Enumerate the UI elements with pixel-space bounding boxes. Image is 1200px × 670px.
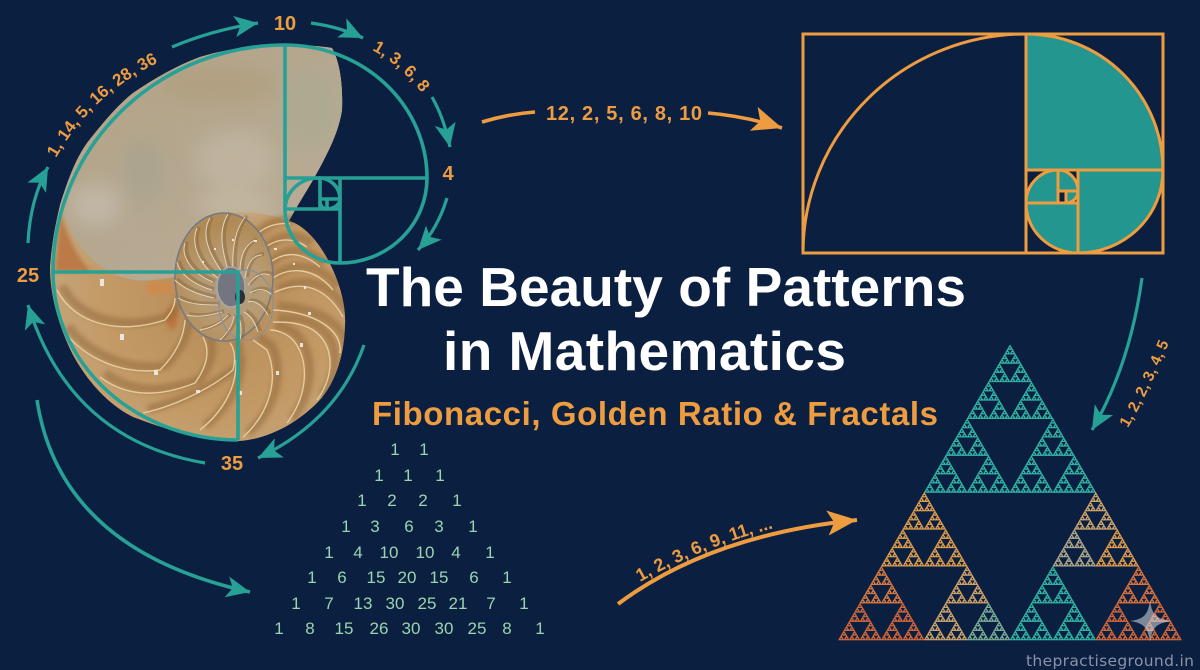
cycle arrows around shell (28, 23, 450, 592)
number triangle: 1 (274, 619, 284, 638)
number triangle: 1 (435, 466, 445, 485)
shell: inner septa (175, 214, 272, 340)
number triangle: 6 (337, 568, 347, 587)
shell: inner septa shadow (177, 213, 274, 339)
number triangle: 15 (430, 568, 448, 587)
number triangle: 1 (324, 543, 334, 562)
number triangle: 1 (519, 594, 529, 613)
shell: chamber septa (57, 224, 343, 437)
number triangle: 8 (502, 619, 512, 638)
number triangle: 10 (380, 543, 398, 562)
golden rectangle (803, 34, 1163, 253)
shell: inner whorl (175, 213, 273, 341)
label: downward sequence: 1, 2, 2, 3, 4, 5 (1120, 340, 1168, 428)
number triangle: 2 (418, 491, 428, 510)
number triangle: 30 (386, 594, 404, 613)
shell sequence labels: 35 (221, 453, 243, 475)
number triangle: 30 (435, 619, 453, 638)
title (366, 256, 966, 382)
shell: siphuncle marks (100, 239, 311, 395)
number triangle: 1 (468, 517, 478, 536)
shell: pearly highlights (68, 71, 330, 230)
number triangle: 8 (305, 619, 315, 638)
number triangle: 1 (535, 619, 545, 638)
number triangle: 25 (468, 619, 486, 638)
number triangle: 13 (354, 594, 372, 613)
arrow: shell to golden rectangle (482, 112, 782, 128)
number triangle: 1 (403, 466, 413, 485)
icon: watermark sparkle (1130, 600, 1172, 642)
number triangle: 1 (502, 568, 512, 587)
arrow: number triangle to fractal (618, 520, 857, 604)
fractal: left corner colours (838, 492, 1010, 640)
number triangle (274, 440, 545, 638)
shell sequence labels: 25 (17, 265, 39, 287)
number triangle: 21 (449, 594, 467, 613)
number triangle: 30 (402, 619, 420, 638)
number triangle: 26 (370, 619, 388, 638)
number triangle: 15 (335, 619, 353, 638)
shell: central core (217, 267, 245, 307)
number triangle: 6 (404, 517, 414, 536)
number triangle: 10 (416, 543, 434, 562)
shell sequence labels: 1, 14, 5, 16, 28, 36 (48, 53, 156, 158)
number triangle: 1 (357, 491, 367, 510)
fractal: teal top (924, 345, 1096, 492)
number triangle: 1 (291, 594, 301, 613)
golden rectangle: grid and spiral (803, 34, 1163, 253)
arrow: golden rectangle to fractal (1092, 278, 1142, 430)
sierpinski triangle fractal (838, 345, 1181, 640)
number triangle: 3 (370, 517, 380, 536)
shell: core dark eye (235, 290, 245, 304)
subtitle: Fibonacci, Golden Ratio & Fractals (372, 395, 938, 432)
shell sequence labels (17, 13, 454, 475)
number triangle: 20 (398, 568, 416, 587)
shell sequence labels: 1, 3, 6, 8 (373, 42, 430, 92)
golden rectangle: teal fills (1026, 34, 1163, 253)
number triangle: 1 (452, 491, 462, 510)
title: The Beauty of Patterns (366, 256, 966, 318)
number triangle: 1 (374, 466, 384, 485)
shell: pearly upper chamber (60, 46, 342, 280)
label: fractal sequence: 1, 2, 3, 6, 9, 11, ... (636, 524, 772, 582)
shell: chamber shadows (62, 220, 348, 433)
number triangle: 1 (341, 517, 351, 536)
shell: central whorl ring (219, 270, 273, 340)
number triangle: 25 (418, 594, 436, 613)
number triangle: 4 (451, 543, 461, 562)
number triangle: 1 (485, 543, 495, 562)
number triangle: 2 (387, 491, 397, 510)
label: golden rectangle sequence: 12, 2, 5, 6, 8, 10 (546, 103, 702, 125)
number triangle: 7 (324, 594, 334, 613)
shell: orange stains (55, 210, 178, 330)
number triangle: 7 (486, 594, 496, 613)
number triangle: 4 (353, 543, 363, 562)
shell sequence labels: 10 (274, 13, 296, 35)
number triangle: 1 (307, 568, 317, 587)
nautilus shell (50, 46, 346, 441)
shell sequence labels: 4 (442, 163, 454, 185)
number triangle: 6 (469, 568, 479, 587)
teal golden spiral overlay (53, 45, 427, 440)
number triangle: 1 (419, 440, 429, 459)
title: in Mathematics (443, 320, 846, 382)
number triangle: 1 (390, 440, 400, 459)
number triangle: 15 (367, 568, 385, 587)
watermark text: thepractiseground.in (1026, 652, 1194, 670)
fractal: right corner colours (1010, 492, 1181, 640)
number triangle: 3 (434, 517, 444, 536)
